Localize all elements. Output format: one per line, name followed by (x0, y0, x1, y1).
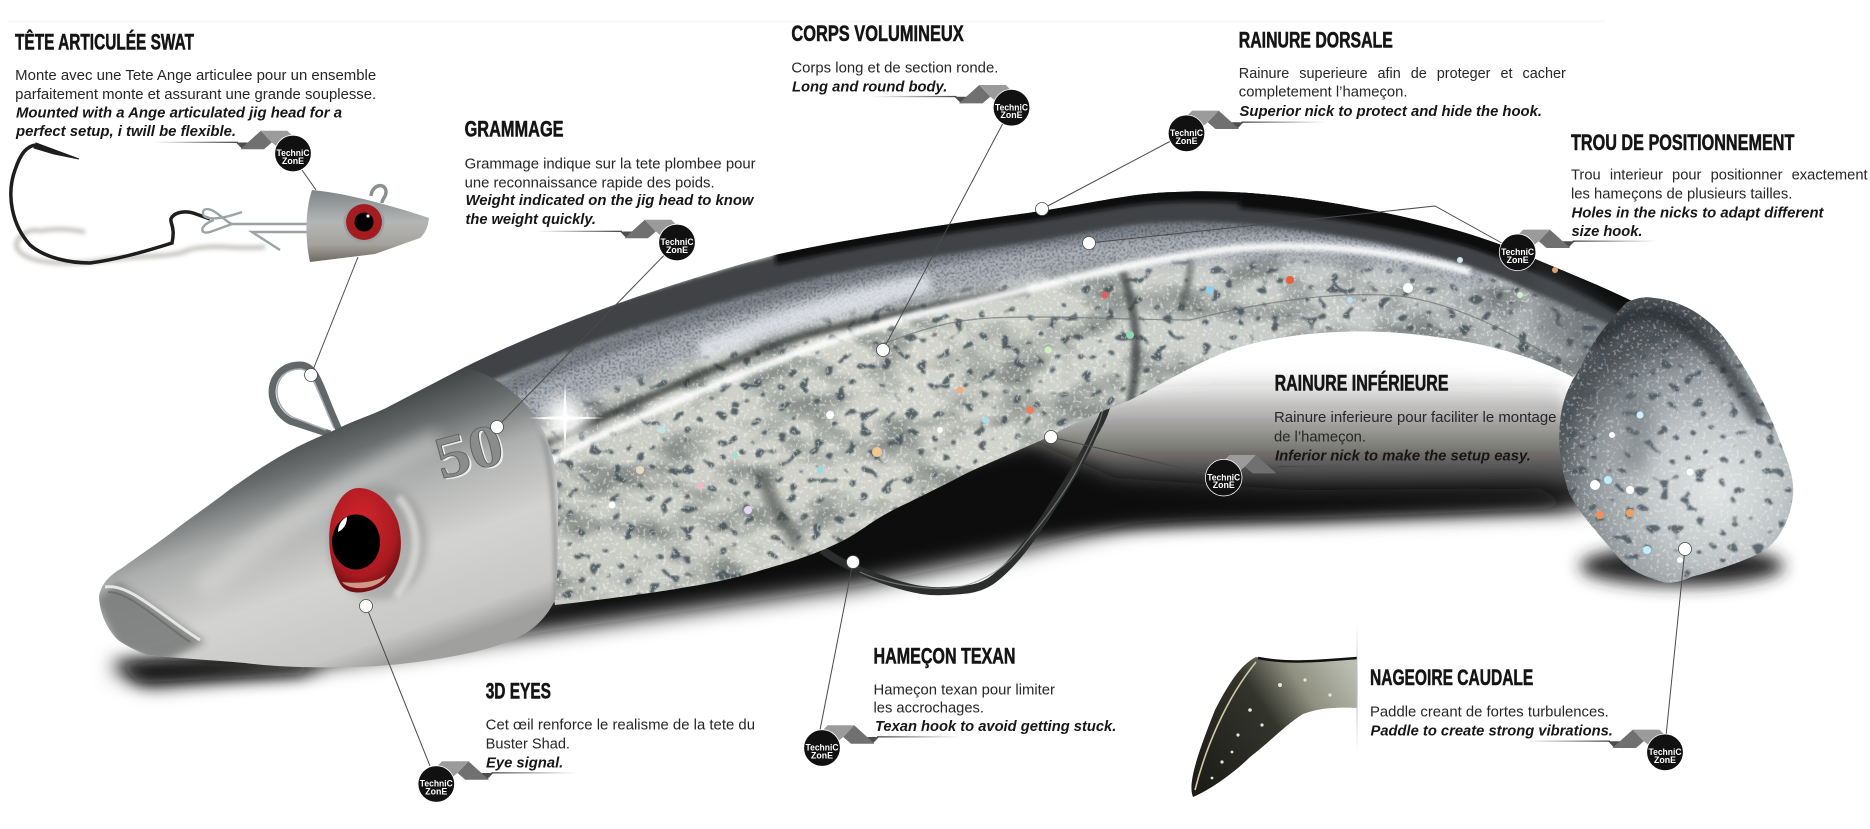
badge: trou: ZonE (1507, 255, 1529, 265)
badge: trou (1499, 230, 1658, 271)
text block: rainure inferieure: Inferior nick to make the setup easy. (1275, 448, 1531, 464)
text block: grammage: the weight quickly. (466, 212, 596, 228)
text block: nageoire caudale: NAGEOIRE CAUDALE (1370, 665, 1533, 690)
badge: eyes (418, 761, 576, 802)
mini image: swat jig head with hook (11, 143, 429, 263)
text block: trou de positionnement: size hook. (1572, 224, 1642, 240)
badge: eyes: ZonE (425, 786, 447, 796)
number 50: 50 (428, 411, 510, 492)
jig head (90, 360, 570, 680)
icon: 3D eye (328, 484, 428, 600)
badge: nageoire: ZonE (1654, 755, 1676, 765)
badge: dorsale (1168, 111, 1326, 152)
badge: corps (872, 85, 1030, 126)
wire eyelet (272, 365, 340, 434)
text block: rainure dorsale: Superior nick to protect and hide the hook. (1240, 104, 1542, 120)
text block: hamecon texan: Hameçon texan pour limiter (874, 682, 1055, 698)
text block: corps volumineux: Corps long et de section ronde. (791, 60, 998, 76)
number 50: 50 (430, 412, 513, 493)
text block: nageoire caudale: Paddle creant de fortes turbulences. (1370, 704, 1609, 720)
badge: grammage: TechniC (660, 237, 694, 247)
mini jig head (371, 186, 386, 203)
text block: rainure dorsale (1239, 27, 1566, 120)
text block: tete articulee swat: Monte avec une Tete Ange articulee pour un ensemble (15, 68, 376, 84)
badge: corps: TechniC (995, 102, 1028, 112)
tail paddle (1559, 297, 1794, 583)
badge: grammage (537, 220, 695, 261)
text block: 3d eyes: Eye signal. (486, 755, 563, 771)
badge: trou: TechniC (1501, 247, 1535, 257)
text block: rainure dorsale: RAINURE DORSALE (1239, 27, 1393, 52)
badge: nageoire: TechniC (1648, 747, 1682, 757)
text block: trou de positionnement: Holes in the nicks to adapt different (1572, 205, 1825, 221)
text block: tete articulee swat: perfect setup, i twill be flexible. (15, 124, 236, 140)
mini image: tail detail (1191, 623, 1358, 797)
lure body (440, 180, 1670, 610)
text block: trou de positionnement: les hameçons de plusieurs tailles. (1571, 186, 1792, 202)
text block: tete articulee swat: Mounted with a Ange articulated jig head for a (16, 106, 342, 122)
text block: rainure inferieure (1274, 371, 1556, 464)
text block: grammage: une reconnaissance rapide des poids. (465, 175, 715, 191)
text block: rainure inferieure: de l’hameçon. (1274, 429, 1366, 445)
spring and wire (202, 209, 308, 250)
badge: eyes: TechniC (420, 779, 453, 789)
badge: dorsale: ZonE (1176, 136, 1198, 146)
text block: corps volumineux (791, 21, 998, 95)
text block: hamecon texan: Texan hook to avoid getting stuck. (875, 719, 1116, 735)
badge: inferieure: ZonE (1213, 480, 1235, 490)
text block: trou de positionnement (1571, 130, 1868, 240)
badge: hamecon (804, 725, 962, 766)
text block: rainure dorsale: Rainure superieure afin de proteger et cacher (1239, 66, 1566, 82)
badge: corps: ZonE (1000, 110, 1022, 120)
text block: hamecon texan: les accrochages. (874, 700, 984, 716)
text block: 3d eyes: Buster Shad. (486, 736, 570, 752)
cast shadow under the lure (108, 370, 1784, 684)
text block: 3d eyes: 3D EYES (486, 678, 551, 703)
badge: tete: ZonE (282, 156, 304, 166)
text block: tete articulee swat: TÊTE ARTICULÉE SWAT (15, 29, 194, 54)
faint top rule (8, 20, 1605, 23)
badge: tete: TechniC (276, 148, 310, 158)
text block: 3d eyes (486, 678, 755, 771)
text block: rainure dorsale: completement l’hameçon. (1239, 85, 1408, 101)
text block: 3d eyes: Cet œil renforce le realisme de la tete du (486, 717, 755, 733)
badge: dorsale: TechniC (1170, 128, 1203, 138)
text block: tete articulee swat (15, 29, 376, 140)
callout dots (304, 202, 1692, 612)
badge: inferieure (1205, 455, 1364, 496)
badge: nageoire (1525, 730, 1683, 771)
text block: rainure inferieure: Rainure inferieure pour faciliter le montage (1274, 410, 1556, 426)
leader lines (302, 108, 1685, 766)
text block: rainure inferieure: RAINURE INFÉRIEURE (1275, 371, 1449, 396)
text block: grammage: Grammage indique sur la tete plombee pour (465, 156, 756, 172)
badge: hamecon: TechniC (806, 743, 839, 753)
texan hook (822, 395, 1109, 591)
sparkle on junction (528, 382, 604, 452)
badge: hamecon: ZonE (811, 750, 833, 760)
text block: corps volumineux: Long and round body. (792, 79, 947, 95)
hook (11, 145, 210, 263)
text block: nageoire caudale (1370, 665, 1613, 739)
badge: tete (153, 131, 311, 172)
text block: grammage: GRAMMAGE (465, 117, 564, 142)
text block: nageoire caudale: Paddle to create strong vibrations. (1370, 723, 1613, 739)
badge: grammage: ZonE (666, 245, 688, 255)
text block: corps volumineux: CORPS VOLUMINEUX (791, 21, 964, 46)
text block: grammage (465, 117, 756, 228)
text block: hamecon texan (874, 643, 1116, 735)
hook shadow (16, 229, 265, 263)
text block: trou de positionnement: Trou interieur pour positionner exactement (1571, 167, 1868, 183)
iridescent glitter (608, 257, 1558, 514)
badge: inferieure: TechniC (1207, 472, 1241, 482)
text block: hamecon texan: HAMEÇON TEXAN (874, 643, 1016, 668)
text block: grammage: Weight indicated on the jig head to know (466, 193, 755, 209)
text block: tete articulee swat: parfaitement monte et assurant une grande souplesse. (15, 87, 376, 103)
